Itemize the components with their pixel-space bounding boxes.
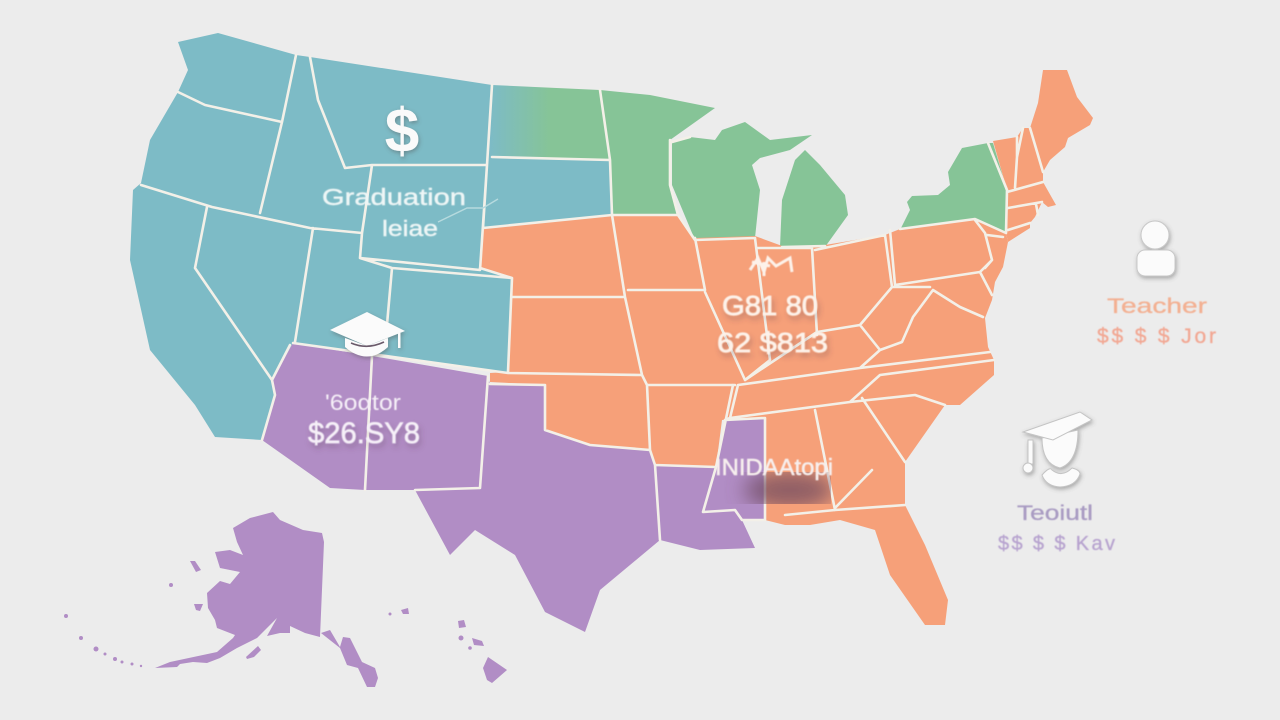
map: Alaska (64, 512, 378, 687)
callout: student salary (998, 502, 1115, 555)
callout: central orange value: G81 80 (722, 290, 818, 321)
region: Minnesota (green) (600, 90, 715, 215)
icon: student with cap (1023, 412, 1092, 487)
region: central and southeast (orange) (480, 215, 1008, 625)
region: lower Michigan (green) (780, 150, 848, 247)
callout: purple region value: $26.SY8 (308, 417, 420, 450)
callout: teacher salary: $$ $ $ Jor (1097, 325, 1216, 348)
shadow: dark blur over Mississippi and Alabama (736, 472, 831, 504)
region: west (teal) (130, 33, 612, 440)
icon: teacher person (1137, 221, 1175, 276)
callout: teacher salary (1097, 295, 1216, 348)
state borders (141, 55, 1043, 540)
callout: purple region value: '6oαtor (325, 390, 401, 415)
region: New York (green) (900, 143, 1007, 233)
callout: graduation label: leiae (382, 216, 438, 241)
region: North Dakota blend (490, 85, 610, 160)
callout: Mississippi label: INIDAAtopi (715, 454, 833, 480)
callout: teacher salary: Teacher (1107, 295, 1207, 318)
callout: purple region value (308, 390, 420, 450)
callout: central orange value (717, 258, 828, 358)
region: New England (orange) (993, 70, 1093, 242)
callout: graduation label: Graduation (322, 184, 466, 210)
callout: student salary: $$ $ $ Kav (998, 533, 1115, 555)
callout: student salary: Teoiutl (1017, 502, 1093, 525)
callout: central orange value: 62 $813 (717, 327, 828, 358)
callout: graduation label (322, 184, 498, 241)
icon: graduation cap on map (330, 312, 405, 356)
region: Wisconsin and upper Michigan (green) (672, 122, 812, 240)
map: Hawaii (388, 608, 507, 683)
icon: dollar sign: $ (385, 97, 419, 166)
region: south (purple) (262, 343, 765, 632)
